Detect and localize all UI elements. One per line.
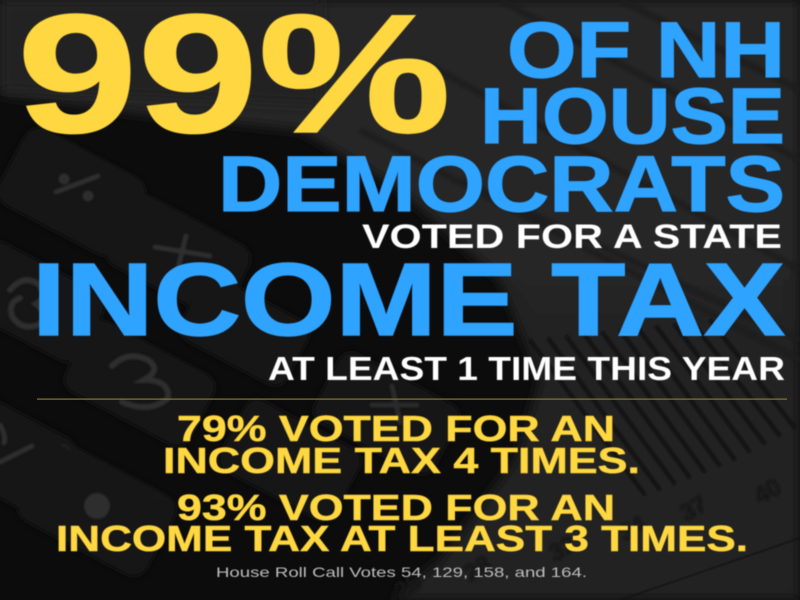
statistic: 79 percent line one: 79% VOTED FOR AN	[177, 408, 615, 449]
background: dark calculator keys and printed paper: 28	[460, 550, 496, 587]
yellow statistics block	[56, 408, 748, 559]
white subheading: at least 1 time this year: AT LEAST 1 TIME THIS YEAR	[268, 350, 785, 387]
headline block	[17, 0, 785, 387]
background: dark calculator keys and printed paper: 37	[676, 490, 712, 527]
background: dark calculator keys and printed paper: 32	[544, 530, 581, 567]
source note: House Roll Call Votes 54, 129, 158, and 164.	[216, 564, 587, 580]
white subheading: voted for a state: VOTED FOR A STATE	[362, 218, 782, 256]
blue heading: House: HOUSE	[480, 71, 785, 160]
statistic: 93 percent line one: 93% VOTED FOR AN	[177, 487, 615, 528]
statistic: 93 percent line two: INCOME TAX AT LEAST 3 TIMES.	[56, 518, 748, 559]
blue heading: Democrats: DEMOCRATS	[218, 139, 785, 228]
statistic: 79 percent line two: INCOME TAX 4 TIMES.	[163, 440, 640, 481]
blue heading: income tax: INCOME TAX	[32, 242, 785, 357]
background: dark calculator keys and printed paper: 34	[614, 510, 652, 547]
faint key faces	[0, 123, 151, 261]
background: dark calculator keys and printed paper: 40	[750, 473, 786, 510]
blue heading: of NH: OF NH	[507, 5, 785, 94]
